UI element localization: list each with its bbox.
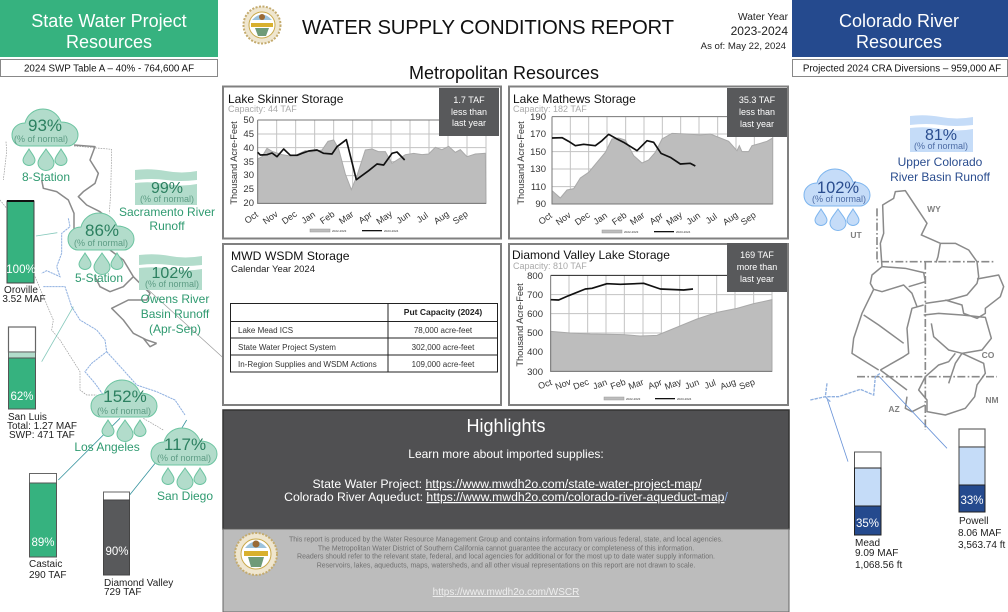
panel: Lake Mathews Storage (509, 86, 788, 238)
cloud: San Diego: 117% (164, 435, 206, 454)
bar: Lake Powell: Powell (959, 516, 988, 527)
panel: footer disclaimer: https://www.mwdh2o.com/WSCR (433, 587, 579, 598)
runoff: Owens River: 102% (152, 265, 192, 282)
labels: state names: NM (985, 395, 999, 405)
water year: 2023-2024 (731, 24, 788, 38)
header: State Water Project Resources: State Water Project (31, 11, 187, 31)
panel: Diamond Valley Lake Storage: 800 (527, 271, 543, 282)
bar: Castaic (29, 474, 66, 581)
runoff: Sacramento River: 99% (151, 180, 183, 197)
panel: Lake Mathews Storage: 35.3 TAF (739, 95, 776, 105)
cloud: Upper Colorado snow (804, 169, 870, 230)
panel: Lake Mathews Storage: Nov (554, 210, 573, 227)
panel: Lake Mathews Storage: 110 (531, 182, 546, 193)
runoff: Upper Colorado River Basin: 81% (925, 127, 957, 144)
panel: Diamond Valley Lake Storage: Aug (719, 377, 737, 392)
table: put capacity: 78,000 acre-feet (414, 326, 473, 335)
table: put capacity: Put Capacity (2024) (404, 307, 482, 317)
panel: Lake Skinner Storage: last year (452, 118, 486, 128)
table: put capacity: 109,000 acre-feet (412, 360, 475, 369)
bar: San Luis (7, 327, 77, 441)
panel: Lake Skinner Storage: 2022-2023 (332, 229, 347, 233)
panel: Lake Mathews Storage: Sep (739, 210, 758, 227)
panel: Lake Mathews Storage: less than (739, 107, 775, 117)
panel: Diamond Valley Lake Storage: Jan (591, 377, 609, 391)
panel: Lake Mathews Storage: Aug (721, 210, 740, 227)
panel: Diamond Valley Lake Storage: last year (740, 274, 774, 284)
panel: Lake Skinner Storage: Apr (357, 209, 374, 226)
header: Colorado River Resources (792, 0, 1008, 57)
bar: San Luis: Total: 1.27 MAF (7, 421, 77, 432)
panel: Diamond Valley Lake Storage: Capacity: 810 TAF (513, 261, 587, 271)
labels: state names: WY (927, 204, 941, 214)
bar: Diamond Valley: 90% (105, 546, 129, 558)
cloud: San Diego: San Diego (157, 489, 213, 503)
panel: Lake Mathews Storage: 2023-2024 (676, 230, 691, 234)
panel: footer disclaimer: Readers should refer to the relevant state, federal, and local agencies for additional or for the most up to date water supply information. (297, 554, 715, 560)
panel: Lake Skinner Storage (223, 86, 501, 238)
runoff: Owens River: Basin Runoff (141, 307, 210, 321)
panel: Diamond Valley Lake Storage: Feb (609, 377, 627, 392)
panel: Lake Skinner Storage: 35 (243, 157, 254, 168)
labels: state names (850, 204, 999, 414)
panel: Highlights: State Water Project: https://www.mwdh2o.com/state-water-project-map/ (312, 477, 702, 491)
cloud: Los Angeles (74, 380, 157, 454)
bar: Lake Powell: 33% (960, 495, 984, 507)
panel: Diamond Valley Lake Storage: Jul (703, 378, 717, 391)
cloud: 5-Station: (% of normal) (74, 238, 128, 248)
cloud: 8-Station: (% of normal) (14, 134, 68, 144)
panel: Lake Mathews Storage: Capacity: 182 TAF (513, 104, 587, 114)
bar: San Luis: SWP: 471 TAF (9, 430, 75, 441)
bar: Castaic: 89% (31, 537, 55, 549)
panel: Lake Mathews Storage: Jan (591, 210, 609, 227)
cloud: San Diego (151, 428, 217, 503)
panel: Lake Skinner Storage: 2023-2024 (384, 229, 399, 233)
panel: Diamond Valley Lake Storage: May (663, 376, 683, 392)
cloud: Upper Colorado snow: 102% (817, 179, 859, 197)
panel: footer disclaimer (223, 529, 789, 612)
panel: Lake Mathews Storage: Jun (684, 210, 702, 227)
panel: Diamond Valley Lake Storage: 400 (527, 347, 543, 358)
panel: Lake Skinner Storage: Mar (337, 209, 355, 226)
water year: Water Year (738, 12, 789, 23)
runoff: Owens River: Owens River (141, 292, 209, 306)
labels: state names: UT (850, 230, 862, 240)
table: put capacity: State Water Project System (238, 343, 336, 352)
bar: Lake Powell: 3,563.74 ft (958, 540, 1005, 551)
panel: Diamond Valley Lake Storage: 2023-2024 (677, 397, 692, 401)
panel: Lake Mathews Storage: Thousand Acre-Feet (516, 121, 526, 205)
table: put capacity: 302,000 acre-feet (412, 343, 475, 352)
bar: Oroville: 3.52 MAF (2, 294, 46, 305)
panel: Lake Skinner Storage: 30 (243, 170, 254, 181)
bar: Oroville: 100% (6, 264, 36, 276)
bar: Diamond Valley: 729 TAF (104, 587, 141, 598)
bar: Diamond Valley (104, 492, 173, 598)
runoff: Upper Colorado River Basin: (% of normal) (914, 141, 968, 151)
panel: Lake Mathews Storage: Apr (648, 210, 665, 227)
panel: Lake Mathews Storage: Mar (628, 210, 646, 227)
panel: Lake Mathews Storage: Jul (704, 211, 719, 226)
cloud: 5-Station (68, 213, 134, 285)
panel: MWD WSDM Storage (223, 244, 501, 405)
panel: Diamond Valley Lake Storage: 600 (527, 309, 543, 320)
subheader: CRA diversions: Projected 2024 CRA Diversions – 959,000 AF (803, 64, 1001, 74)
runoff: Sacramento River: Sacramento River (119, 205, 215, 219)
runoff: Upper Colorado River Basin: Upper Colorado (898, 155, 983, 169)
panel: Diamond Valley Lake Storage: Mar (627, 377, 645, 392)
bar: Lake Powell: 8.06 MAF (958, 528, 1001, 539)
panel: Lake Mathews Storage: 170 (530, 129, 546, 140)
panel: Diamond Valley Lake Storage: 169 TAF (740, 250, 774, 260)
panel: Lake Skinner Storage: 45 (243, 129, 254, 140)
map: Colorado River basin (810, 191, 1004, 462)
panel: MWD WSDM Storage: Calendar Year 2024 (231, 264, 315, 275)
bar: Lake Powell (958, 429, 1005, 551)
panel: Lake Skinner Storage: Dec (280, 209, 299, 226)
panel: Diamond Valley Lake Storage: Dec (572, 377, 591, 392)
panel: Diamond Valley Lake Storage: more than (737, 262, 777, 272)
cloud: Los Angeles: (% of normal) (97, 406, 151, 416)
map: California state and watersheds (0, 142, 223, 497)
runoff: Upper Colorado River Basin: River Basin Runoff (890, 170, 991, 184)
panel: Lake Mathews Storage: 150 (530, 147, 546, 158)
panel: Diamond Valley Lake Storage: Thousand Acre-Feet (515, 283, 525, 367)
panel: Lake Skinner Storage: Thousand Acre-Feet (229, 121, 239, 205)
panel: Lake Skinner Storage: 50 (243, 115, 254, 126)
runoff: Sacramento River: (% of normal) (140, 194, 194, 204)
panel: Lake Skinner Storage: Sep (451, 209, 470, 226)
cloud: San Diego: (% of normal) (157, 453, 211, 463)
panel: Diamond Valley Lake Storage: Sep (738, 377, 756, 392)
bar: Oroville: Oroville (4, 285, 38, 296)
table: put capacity: Lake Mead ICS (238, 326, 293, 335)
panel: Highlights: Colorado River Aqueduct: https://www.mwdh2o.com/colorado-river-aqueduct-map/ (284, 490, 728, 504)
panel: Diamond Valley Lake Storage: 2022-2023 (626, 397, 641, 401)
panel: Diamond Valley Lake Storage: 500 (527, 328, 543, 339)
panel: Diamond Valley Lake Storage: Diamond Valley Lake Storage (512, 248, 670, 262)
panel: Lake Mathews Storage: Oct (537, 210, 554, 227)
chart: Lake Mathews (552, 117, 773, 204)
panel: Lake Skinner Storage: Lake Skinner Storage (228, 92, 344, 106)
panel: Lake Skinner Storage: Nov (261, 209, 280, 226)
panel: Diamond Valley Lake Storage: Oct (537, 377, 554, 391)
panel: Lake Skinner Storage: 25 (243, 184, 254, 195)
panel: Lake Skinner Storage: Jul (415, 210, 430, 225)
panel: Lake Mathews Storage: 190 (530, 112, 546, 123)
panel: Lake Skinner Storage: less than (451, 107, 487, 117)
cloud: Los Angeles: Los Angeles (74, 440, 140, 454)
panel: footer disclaimer: Reservoirs, lakes, aqueducts, maps, watersheds, and all other visual representations on this report are not drawn to scale. (317, 562, 695, 570)
subheader: CRA diversions (792, 60, 1008, 76)
panel: Lake Mathews Storage: Lake Mathews Storage (513, 92, 636, 106)
bar: Castaic: 290 TAF (29, 570, 66, 581)
panel: Diamond Valley Lake Storage: Jun (683, 377, 701, 391)
bar: Lake Mead: 35% (856, 518, 879, 530)
panel: Lake Skinner Storage: Aug (432, 209, 451, 226)
panel: Lake Skinner Storage: May (374, 208, 395, 227)
chart: Lake Skinner (258, 120, 486, 203)
bar: San Luis: 62% (10, 391, 34, 403)
header: State Water Project Resources (0, 0, 218, 57)
panel: Lake Skinner Storage: 1.7 TAF (453, 95, 485, 105)
panel: Lake Mathews Storage: 2022-2023 (624, 230, 639, 234)
panel: Lake Skinner Storage: Jun (394, 209, 412, 226)
table: put capacity: In-Region Supplies and WSDM Actions (238, 360, 377, 369)
subheader: SWP Table A: 2024 SWP Table A – 40% - 764,600 AF (24, 64, 194, 74)
water year: As of: May 22, 2024 (701, 41, 787, 52)
icon: Metropolitan seal footer (235, 533, 277, 575)
cloud: Upper Colorado snow: (% of normal) (812, 194, 866, 204)
subheader: SWP Table A (0, 60, 218, 76)
bar: Lake Mead: Mead (855, 538, 880, 549)
panel: Lake Mathews Storage: May (664, 209, 685, 228)
bar: Lake Mead (854, 452, 902, 571)
labels: state names: AZ (888, 404, 900, 414)
bar: Castaic: Castaic (29, 559, 62, 570)
cloud: 5-Station: 5-Station (75, 271, 123, 285)
header: State Water Project Resources: Resources (66, 32, 152, 52)
panel: Lake Skinner Storage: Jan (299, 209, 317, 226)
cloud: 8-Station: 93% (28, 116, 62, 135)
runoff: Sacramento River: Runoff (149, 219, 185, 233)
panel: Diamond Valley Lake Storage: Nov (554, 377, 573, 392)
panel: Lake Mathews Storage: Dec (573, 210, 592, 227)
panel: Lake Mathews Storage: Feb (610, 210, 629, 227)
panel: Diamond Valley Lake Storage: 300 (527, 367, 543, 378)
panel: Diamond Valley Lake Storage: 700 (527, 290, 543, 301)
icon: Metropolitan seal top (244, 6, 280, 44)
runoff: Owens River (139, 254, 210, 336)
cloud: Los Angeles: 152% (103, 387, 147, 406)
panel: Diamond Valley Lake Storage (509, 243, 788, 405)
header: Colorado River Resources: Colorado River (839, 11, 959, 31)
panel: Lake Skinner Storage: Capacity: 44 TAF (228, 104, 297, 114)
runoff: Sacramento River (119, 169, 215, 233)
labels: state names: CO (982, 350, 995, 360)
cloud: 8-Station: 8-Station (22, 170, 70, 184)
panel: Highlights: Learn more about imported supplies: (408, 447, 604, 461)
panel: MWD WSDM Storage: MWD WSDM Storage (231, 249, 350, 263)
runoff: Owens River: (Apr-Sep) (149, 322, 201, 336)
panel: Lake Mathews Storage: 130 (530, 164, 546, 175)
bar: Lake Mead: 1,068.56 ft (855, 560, 902, 571)
panel: Lake Skinner Storage: 20 (243, 198, 254, 209)
bar: Oroville (2, 200, 46, 305)
cloud: 8-Station (12, 109, 78, 184)
panel: Lake Skinner Storage: Oct (243, 209, 260, 226)
panel: Diamond Valley Lake Storage: Apr (647, 377, 663, 391)
heading: Metropolitan Resources: Metropolitan Resources (409, 63, 599, 83)
title: WATER SUPPLY CONDITIONS REPORT (302, 17, 674, 39)
header: Colorado River Resources: Resources (856, 32, 942, 52)
panel: Lake Mathews Storage: last year (740, 119, 774, 129)
panel: Highlights (223, 410, 789, 529)
runoff: Upper Colorado River Basin (890, 115, 991, 184)
panel: Lake Skinner Storage: 40 (243, 143, 254, 154)
chart: Diamond Valley (551, 275, 772, 371)
cloud: 5-Station: 86% (85, 221, 119, 240)
bar: Lake Mead: 9.09 MAF (855, 548, 898, 559)
water year (701, 12, 789, 52)
panel: Lake Skinner Storage: Feb (318, 209, 337, 226)
runoff: Owens River: (% of normal) (145, 279, 199, 289)
panel: Lake Mathews Storage: 90 (535, 199, 546, 210)
table: put capacity (230, 303, 498, 372)
panel: footer disclaimer: This report is produced by the Water Resource Management Group and contains information from various federal, state, and local agencies. (289, 536, 723, 544)
panel: Highlights: Highlights (466, 416, 546, 436)
bar: Diamond Valley: Diamond Valley (104, 578, 173, 589)
bar: San Luis: San Luis (8, 412, 47, 423)
panel: footer disclaimer: The Metropolitan Water District of Southern California cannot guarantee the accuracy or completeness of this information. (318, 546, 694, 552)
